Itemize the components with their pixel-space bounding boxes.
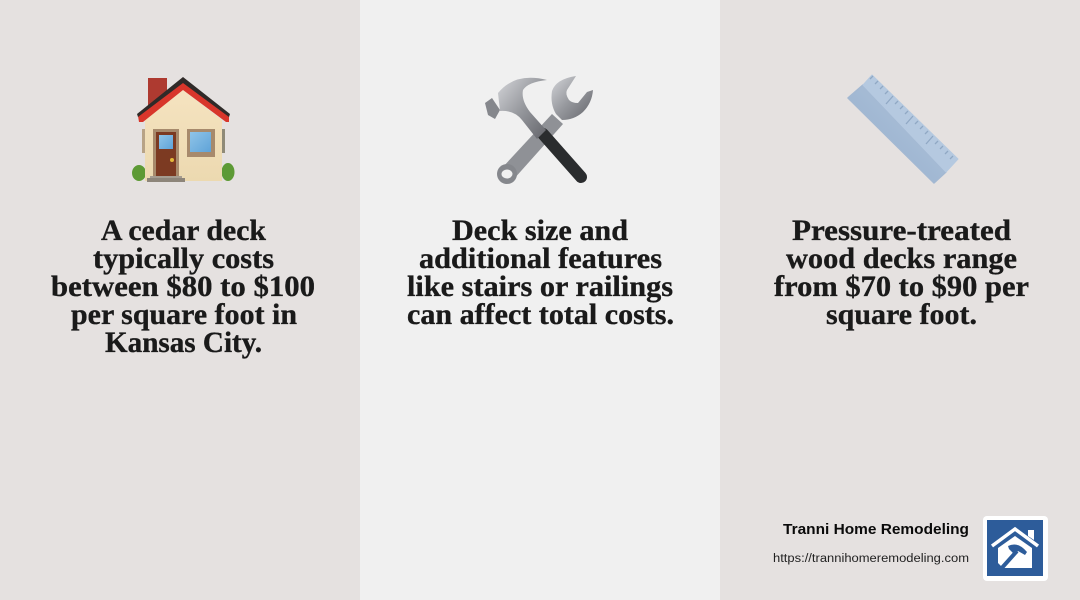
icon: hammer and wrench <box>485 76 593 184</box>
heading: pressure-treated text: from $70 to $90 per <box>774 270 1029 303</box>
panel: deck size and features <box>360 0 720 600</box>
heading: cedar deck text: Kansas City. <box>105 326 262 359</box>
heading: deck size text: can affect total costs. <box>407 298 674 331</box>
heading: cedar deck text <box>51 214 315 359</box>
heading: cedar deck text: typically costs <box>93 242 274 275</box>
icon: ruler <box>848 75 958 183</box>
heading: deck size text: like stairs or railings <box>407 270 673 303</box>
heading: deck size text: additional features <box>419 242 662 275</box>
icon: company logo <box>983 516 1048 581</box>
heading: cedar deck text: A cedar deck <box>101 214 266 247</box>
heading: deck size text: Deck size and <box>452 214 628 247</box>
footer: website url: https://trannihomeremodeling.com <box>773 553 969 565</box>
heading: cedar deck text: per square foot in <box>71 298 297 331</box>
heading: pressure-treated text: square foot. <box>826 298 977 331</box>
heading: cedar deck text: between $80 to $100 <box>51 270 315 303</box>
heading: pressure-treated text: wood decks range <box>786 242 1017 275</box>
panel: cedar deck cost <box>0 0 360 600</box>
heading: pressure-treated text <box>774 214 1029 331</box>
heading: pressure-treated text: Pressure-treated <box>792 214 1011 247</box>
icon: house <box>132 77 234 182</box>
heading: deck size text <box>407 214 674 331</box>
footer: brand name: Tranni Home Remodeling <box>783 522 969 538</box>
panel: pressure-treated wood <box>720 0 1080 600</box>
